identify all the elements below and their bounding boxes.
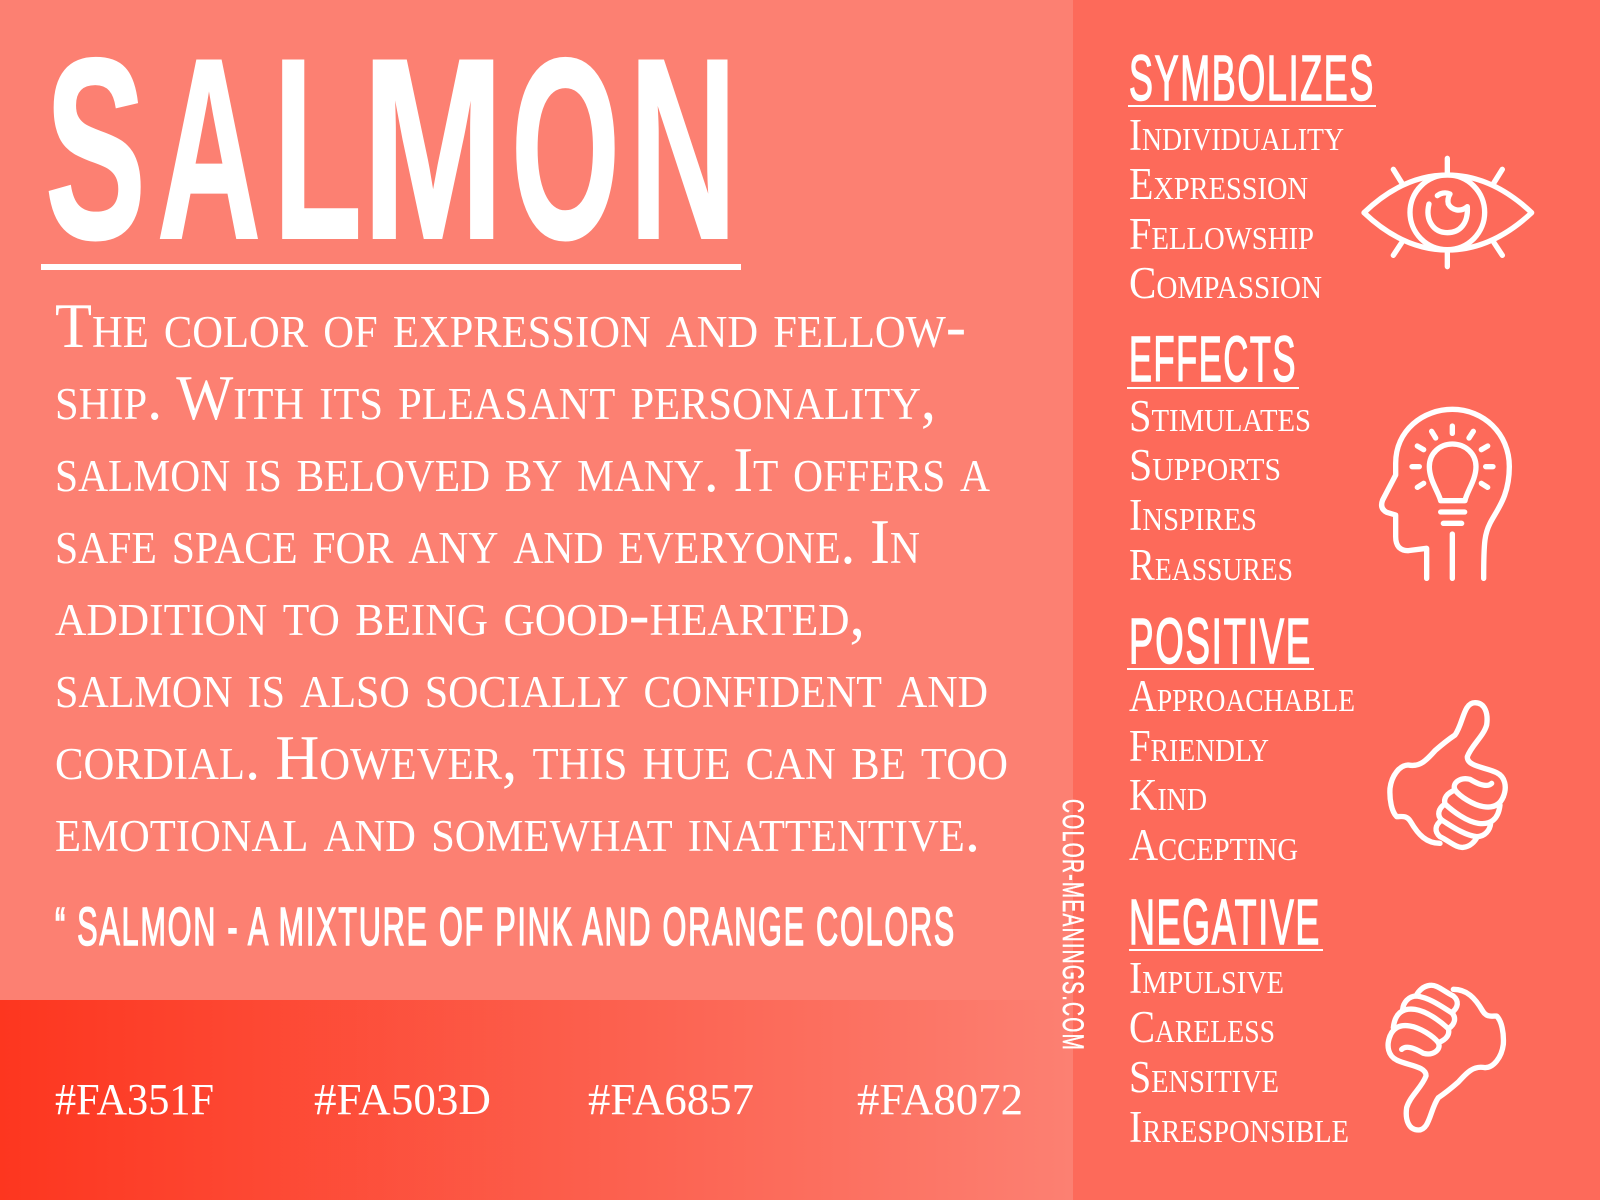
section: symbolizes: SYMBOLIZES [1129,42,1375,114]
title: A [157,4,261,293]
section: effects: EFFECTS [1129,323,1297,395]
section: negative: Sensitive [1129,1052,1279,1102]
section: positive: Kind [1129,770,1207,820]
section: positive [1127,605,1355,870]
icon: head with light bulb [1382,409,1509,578]
title: O [511,4,620,293]
section: negative [1129,886,1349,1152]
panel: main background [0,0,1073,1000]
text block: description [55,290,1008,865]
title: M [362,4,504,293]
text block: description: emotional and somewhat inattentive. [55,794,980,865]
section: positive: Friendly [1129,721,1269,771]
text block: description: The color of expression and fellow- [55,290,966,361]
section: symbolizes: Fellowship [1129,209,1314,259]
text block: description: safe space for any and everyone. In [55,506,920,577]
section: negative: Careless [1129,1002,1275,1052]
text block: description: addition to being good-hearted, [55,578,865,649]
section: effects: Stimulates [1129,391,1311,441]
icon: thumbs down [1388,985,1503,1130]
hex codes [55,1075,1023,1124]
section: symbolizes [1128,42,1376,308]
hex codes: #FA351F [55,1075,214,1124]
text block: description: salmon is also socially confident and [55,650,988,721]
hex codes: #FA8072 [857,1075,1023,1124]
vertical site credit: COLOR-MEANINGS.COM [1056,799,1089,1051]
section: symbolizes: Compassion [1129,258,1322,308]
section: negative: NEGATIVE [1129,886,1321,958]
hex codes: #FA6857 [588,1075,754,1124]
text block: description: salmon is beloved by many. It offers a [55,434,990,505]
title: L [273,4,362,293]
title [41,4,741,293]
section: effects: Reassures [1129,540,1293,590]
panel: hex colour gradient strip [0,1000,1073,1200]
section: effects [1127,323,1311,590]
section: symbolizes: Individuality [1129,110,1344,160]
section: effects: Inspires [1129,490,1257,540]
title: N [629,4,737,293]
text block: description: ship. With its pleasant personality, [55,362,936,433]
section: positive: Approachable [1129,671,1355,721]
icon: eye [1364,158,1532,267]
section: negative: Irresponsible [1129,1102,1349,1152]
icon: thumbs up [1390,703,1505,847]
section: positive: Accepting [1129,820,1298,870]
hex codes: #FA503D [314,1075,491,1124]
section: effects: Supports [1129,440,1281,490]
panel: sidebar background [1073,0,1600,1200]
section: symbolizes: Expression [1129,159,1308,209]
title: S [45,4,146,293]
quote: mixture of pink and orange: “ SALMON - A MIXTURE OF PINK AND ORANGE COLORS [55,897,956,957]
text block: description: cordial. However, this hue can be too [55,722,1008,793]
section: positive: POSITIVE [1129,605,1312,677]
section: negative: Impulsive [1129,953,1284,1003]
